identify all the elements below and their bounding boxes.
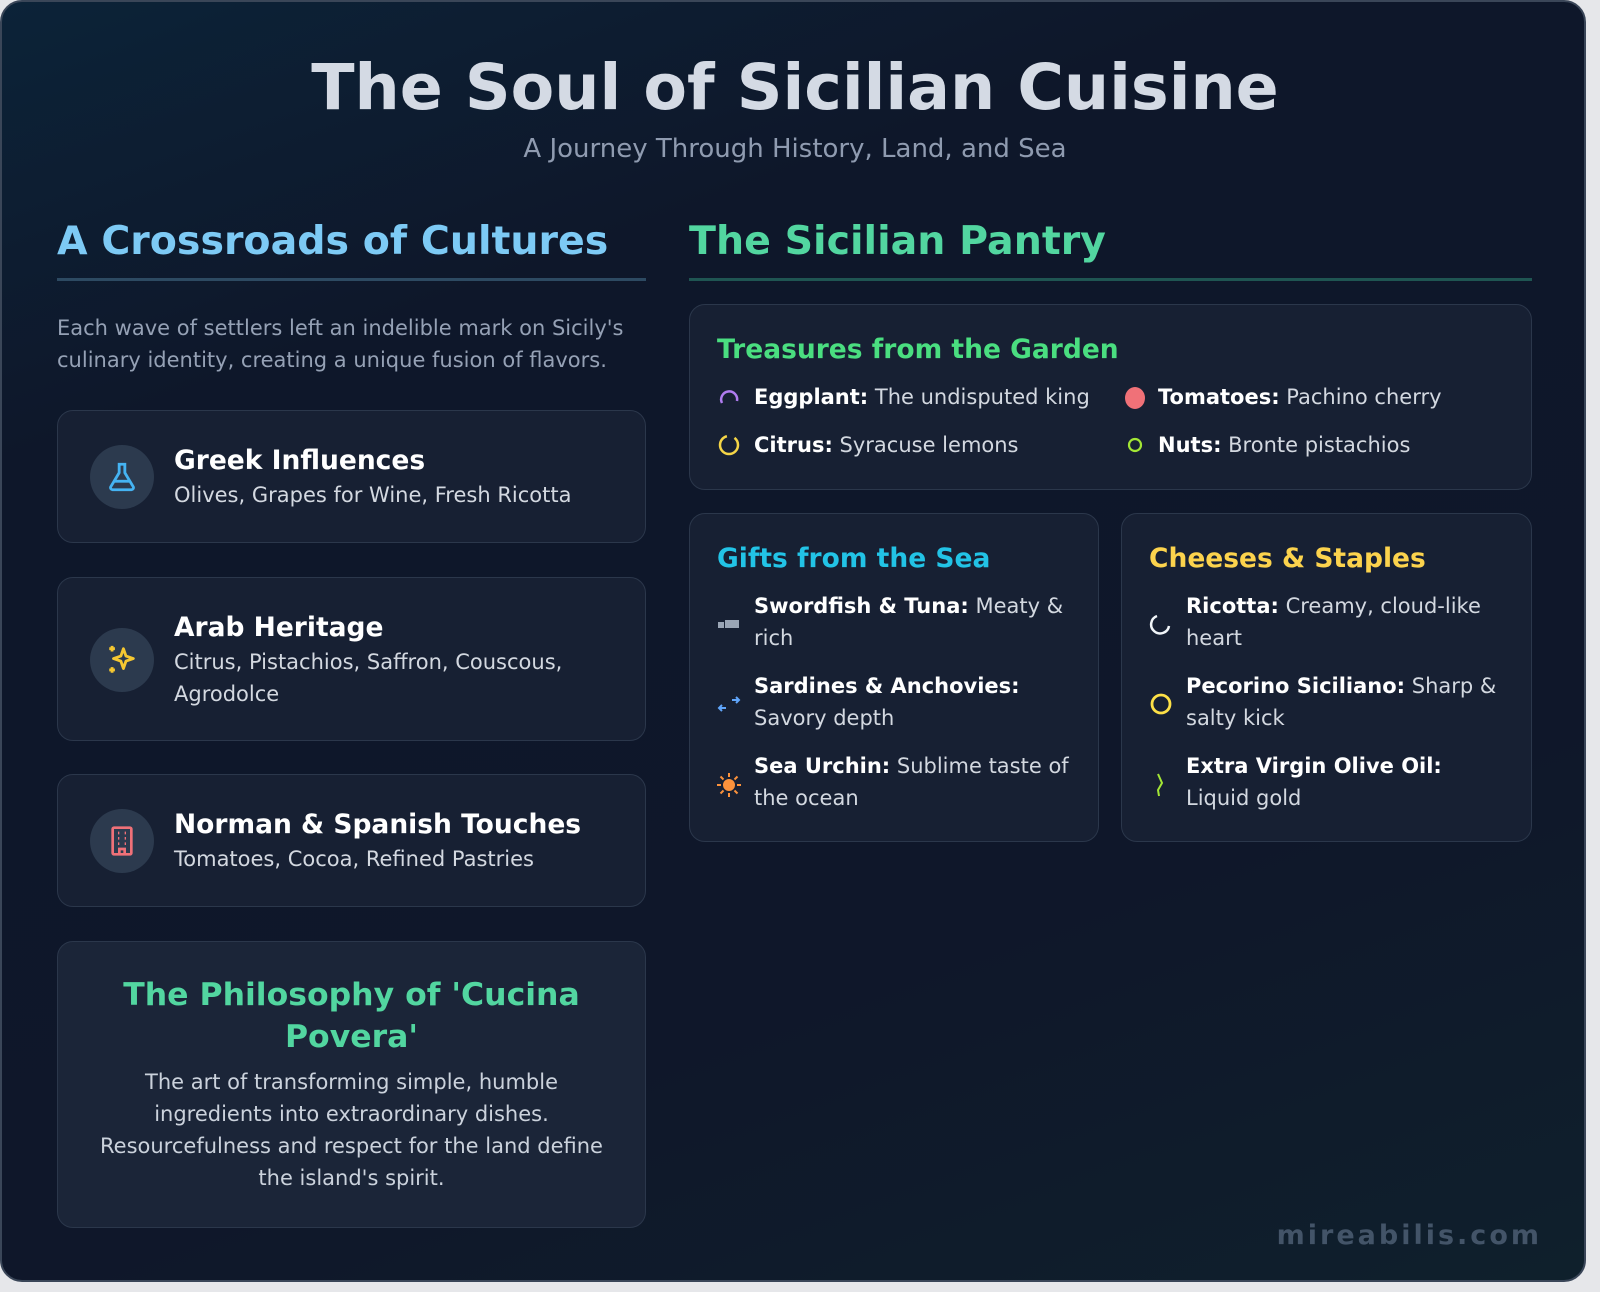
- item: swordfish: Swordfish & Tuna: Meaty & rich: [754, 594, 1063, 650]
- icon: urchin: [717, 773, 741, 797]
- norman text: Tomatoes, Cocoa, Refined Pastries: [174, 847, 534, 871]
- arab title: Arab Heritage: [174, 612, 383, 643]
- title: The Soul of Sicilian Cuisine: [311, 50, 1279, 124]
- item: sardines: Sardines & Anchovies: Savory depth: [754, 674, 1020, 730]
- icon: tomato: [1125, 387, 1145, 409]
- greek title: Greek Influences: [174, 445, 425, 476]
- icon: building: [90, 809, 154, 873]
- icon: flask: [90, 445, 154, 509]
- cheese heading: Cheeses & Staples: [1149, 543, 1426, 574]
- panel: garden: [689, 304, 1532, 490]
- watermark: mireabilis.com: [1277, 1220, 1542, 1251]
- greek text: Olives, Grapes for Wine, Fresh Ricotta: [174, 483, 571, 507]
- icon: arrows: [718, 696, 740, 712]
- panel: philosophy: [57, 941, 646, 1228]
- heading: pantry: The Sicilian Pantry: [689, 218, 1106, 264]
- philosophy title: The Philosophy of 'Cucina Povera': [123, 977, 580, 1055]
- icon: eggplant: [720, 390, 738, 404]
- panel: norman: [57, 774, 646, 907]
- item: urchin: Sea Urchin: Sublime taste of the ocean: [754, 754, 1069, 810]
- panel: arab: [57, 577, 646, 741]
- item: ricotta: Ricotta: Creamy, cloud-like heart: [1186, 594, 1481, 650]
- icon: fish: [718, 620, 739, 628]
- heading: crossroads: A Crossroads of Cultures: [57, 218, 608, 264]
- subtitle: A Journey Through History, Land, and Sea: [523, 134, 1067, 164]
- icon: ricotta: [1150, 614, 1170, 635]
- panel: greek: [57, 410, 646, 543]
- intro text: Each wave of settlers left an indelible mark on Sicily's culinary identity, creating a unique fusion of flavors.: [57, 316, 624, 372]
- arab text: Citrus, Pistachios, Saffron, Couscous, Agrodolce: [174, 650, 562, 706]
- heading: pantry: [689, 218, 1532, 281]
- panel: sea: [689, 513, 1099, 842]
- item: citrus: Citrus: Syracuse lemons: [754, 433, 1018, 457]
- item: eggplant: Eggplant: The undisputed king: [754, 385, 1090, 409]
- item: nuts: Nuts: Bronte pistachios: [1158, 433, 1410, 457]
- icon: sparkles: [90, 628, 154, 692]
- item: oil: Extra Virgin Olive Oil: Liquid gold: [1186, 754, 1442, 810]
- item: tomatoes: Tomatoes: Pachino cherry: [1158, 385, 1442, 409]
- philosophy text: The art of transforming simple, humble ingredients into extraordinary dishes. Resourcefulness and respect for the land define the island's spirit.: [100, 1070, 603, 1190]
- icon: nut: [1128, 438, 1142, 452]
- sea heading: Gifts from the Sea: [717, 543, 990, 574]
- icon: citrus: [718, 435, 740, 456]
- item: pecorino: Pecorino Siciliano: Sharp & salty kick: [1186, 674, 1496, 730]
- panel: cheeses: [1121, 513, 1532, 842]
- icon: pecorino: [1150, 694, 1172, 714]
- norman title: Norman & Spanish Touches: [174, 809, 581, 840]
- icon: oil: [1157, 774, 1164, 796]
- heading: crossroads: [57, 218, 646, 281]
- garden heading: Treasures from the Garden: [717, 334, 1119, 365]
